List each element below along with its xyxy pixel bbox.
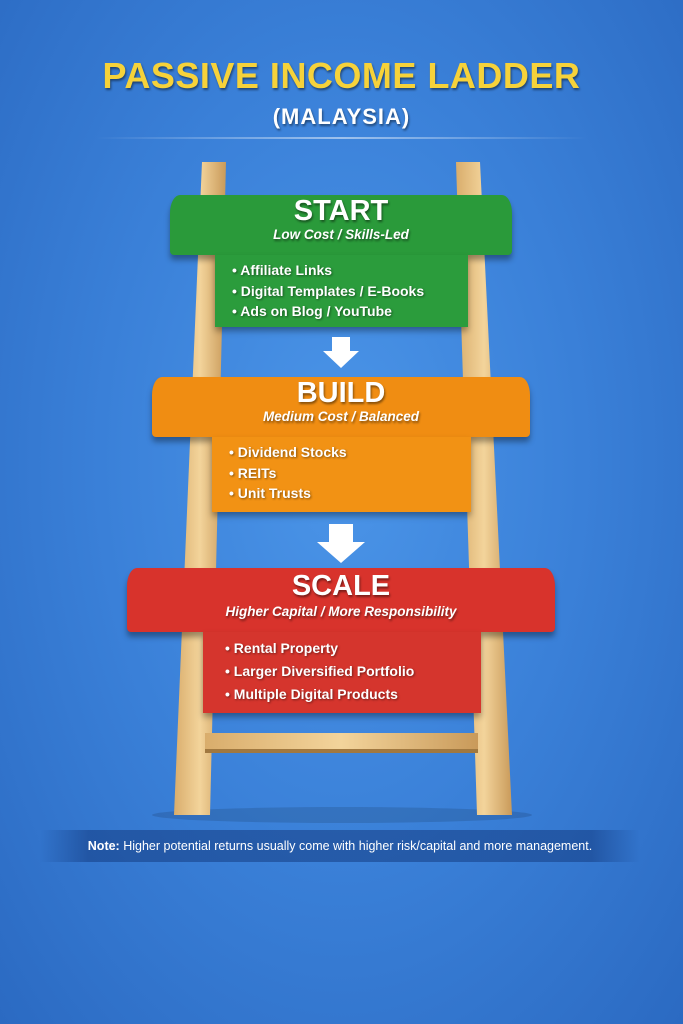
- note: [40, 830, 640, 862]
- build banner: BUILD: [297, 377, 385, 409]
- build banner: [152, 377, 530, 437]
- start banner: START: [294, 195, 388, 227]
- build list: Unit Trusts: [238, 485, 311, 501]
- start banner: Low Cost / Skills-Led: [273, 227, 409, 242]
- scale list: Larger Diversified Portfolio: [234, 663, 414, 679]
- start list: Digital Templates / E-Books: [241, 282, 424, 298]
- start list: Affiliate Links: [240, 262, 332, 278]
- start banner: [170, 195, 512, 255]
- arrow 1: [323, 337, 359, 368]
- build banner: Medium Cost / Balanced: [263, 409, 419, 424]
- panel: build: [148, 377, 534, 520]
- subtitle: (MALAYSIA): [273, 104, 410, 129]
- panel: start: [166, 195, 516, 335]
- scale list: [203, 632, 481, 713]
- panel: scale: [124, 568, 558, 721]
- title: PASSIVE INCOME LADDER: [103, 55, 580, 96]
- note: Note: Higher potential returns usually come with higher risk/capital and more management.: [88, 839, 592, 853]
- scale banner: Higher Capital / More Responsibility: [225, 604, 457, 619]
- scale banner: [127, 568, 555, 632]
- build list: [212, 437, 471, 512]
- scale banner: SCALE: [292, 570, 390, 602]
- arrow 2: [317, 524, 365, 563]
- start list: [215, 255, 468, 327]
- scale list: Rental Property: [234, 640, 338, 656]
- build list: REITs: [238, 464, 276, 480]
- start list: Ads on Blog / YouTube: [240, 303, 392, 319]
- build list: Dividend Stocks: [238, 444, 347, 460]
- scale list: Multiple Digital Products: [234, 686, 398, 702]
